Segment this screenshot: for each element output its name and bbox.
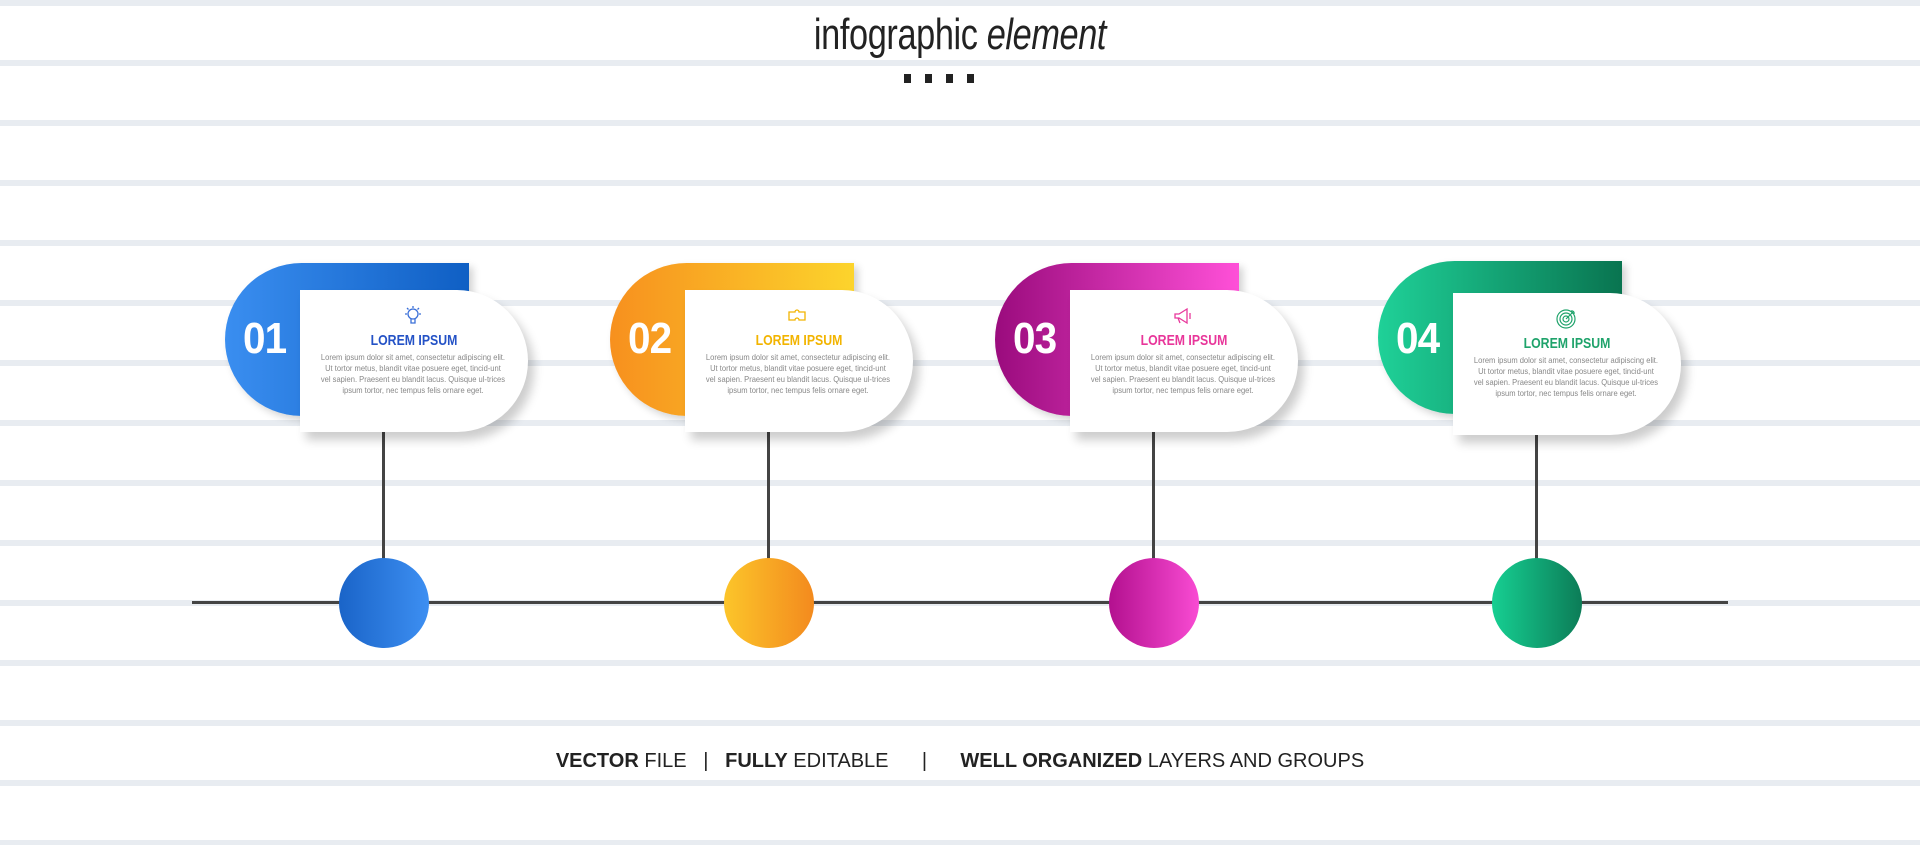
card 1: LOREM IPSUM [371, 332, 457, 349]
title: infographic element [814, 10, 1106, 59]
number 3: 03 [1013, 314, 1056, 363]
step 1 [225, 263, 538, 648]
circle 3 [1109, 558, 1199, 648]
pill 4 [1378, 261, 1622, 414]
card 3: Lorem ipsum dolor sit amet, consectetur adipiscing elit. Ut tortor metus, blandit vitae posuere eget, tincid-unt vel sapien. Praesent eu blandit lacus. Quisque ul-trices ipsum tortor, nec tempus felis ornare eget. [1091, 352, 1275, 395]
timeline line [192, 601, 1728, 604]
card 4: LOREM IPSUM [1524, 335, 1610, 352]
card 2 [685, 290, 913, 432]
step 3 [995, 263, 1308, 648]
title dots [904, 74, 974, 83]
card 2: LOREM IPSUM [756, 332, 842, 349]
pill 2 [610, 263, 854, 416]
card 4 [1453, 293, 1681, 435]
number 4: 04 [1396, 314, 1439, 363]
card 2: Lorem ipsum dolor sit amet, consectetur adipiscing elit. Ut tortor metus, blandit vitae posuere eget, tincid-unt vel sapien. Praesent eu blandit lacus. Quisque ul-trices ipsum tortor, nec tempus felis ornare eget. [706, 352, 890, 395]
number 1: 01 [243, 314, 286, 363]
pill 1 [225, 263, 469, 416]
step 4 [1378, 261, 1692, 648]
step 2 [610, 263, 924, 648]
circle 1 [339, 558, 429, 648]
icon: target [1556, 309, 1576, 329]
number 2: 02 [628, 314, 671, 363]
card 3 [1070, 290, 1298, 432]
icon: bulb [405, 306, 421, 324]
card 1: Lorem ipsum dolor sit amet, consectetur adipiscing elit. Ut tortor metus, blandit vitae posuere eget, tincid-unt vel sapien. Praesent eu blandit lacus. Quisque ul-trices ipsum tortor, nec tempus felis ornare eget. [321, 352, 505, 395]
circle 4 [1492, 558, 1582, 648]
circle 2 [724, 558, 814, 648]
card 3: LOREM IPSUM [1141, 332, 1227, 349]
footer: VECTOR FILE | FULLY EDITABLE | WELL ORGANIZED LAYERS AND GROUPS [556, 750, 1364, 772]
icon: megaphone [1174, 308, 1191, 324]
card 4: Lorem ipsum dolor sit amet, consectetur adipiscing elit. Ut tortor metus, blandit vitae posuere eget, tincid-unt vel sapien. Praesent eu blandit lacus. Quisque ul-trices ipsum tortor, nec tempus felis ornare eget. [1474, 355, 1658, 398]
pill 3 [995, 263, 1239, 416]
icon: puzzle [788, 309, 806, 321]
card 1 [300, 290, 528, 432]
